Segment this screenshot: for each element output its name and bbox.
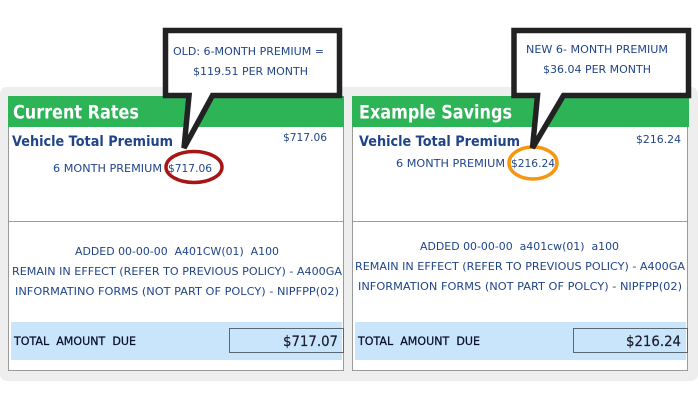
red circle highlight [166, 152, 222, 182]
heading: current rates: Current Rates [13, 102, 139, 124]
forms text: ADDED 00-00-00 a401cw(01) a100 [420, 240, 619, 253]
callout: old premium [166, 30, 340, 148]
total amount due band [355, 322, 688, 360]
panel: example savings [352, 96, 689, 370]
total amount due band: $216.24 [626, 334, 681, 350]
forms text: INFORMATION FORMS (NOT PART OF POLCY) - NIPFPP(02) [358, 280, 682, 293]
heading: example savings: Example Savings [359, 102, 512, 124]
panel: current rates [8, 96, 344, 370]
six month premium label: 6 MONTH PREMIUM [396, 157, 505, 170]
heading bar: current rates [8, 96, 344, 127]
total amount due band [11, 322, 344, 360]
six month premium value: $216.24 [511, 157, 555, 170]
vehicle total premium label: Vehicle Total Premium [359, 134, 520, 150]
callout: new premium: NEW 6- MONTH PREMIUM [526, 43, 668, 56]
six month premium label: 6 MONTH PREMIUM [53, 162, 162, 175]
divider [352, 220, 688, 222]
divider [8, 220, 344, 222]
heading bar: example savings [352, 96, 689, 127]
callout: new premium: $36.04 PER MONTH [543, 63, 651, 76]
forms text [12, 245, 343, 298]
callout: old premium: $119.51 PER MONTH [193, 65, 308, 78]
six month premium value: $717.06 [168, 162, 212, 175]
forms text: REMAIN IN EFFECT (REFER TO PREVIOUS POLICY) - A400GA [355, 260, 686, 273]
forms text [355, 240, 686, 293]
vehicle total premium value: $216.24 [636, 133, 681, 146]
forms text: ADDED 00-00-00 A401CW(01) A100 [75, 245, 279, 258]
callout: new premium [514, 30, 688, 148]
callout: old premium: OLD: 6-MONTH PREMIUM = [173, 45, 324, 58]
vehicle total premium label: Vehicle Total Premium [12, 134, 173, 150]
vehicle total premium value: $717.06 [283, 131, 327, 144]
total amount due band: TOTAL AMOUNT DUE [357, 334, 480, 348]
forms text: INFORMATINO FORMS (NOT PART OF POLCY) - NIPFPP(02) [15, 285, 339, 298]
forms text: REMAIN IN EFFECT (REFER TO PREVIOUS POLICY) - A400GA [12, 265, 343, 278]
orange circle highlight [509, 147, 557, 179]
total amount due band: $717.07 [283, 334, 338, 350]
background band [0, 87, 698, 381]
total amount due band: TOTAL AMOUNT DUE [13, 334, 136, 348]
